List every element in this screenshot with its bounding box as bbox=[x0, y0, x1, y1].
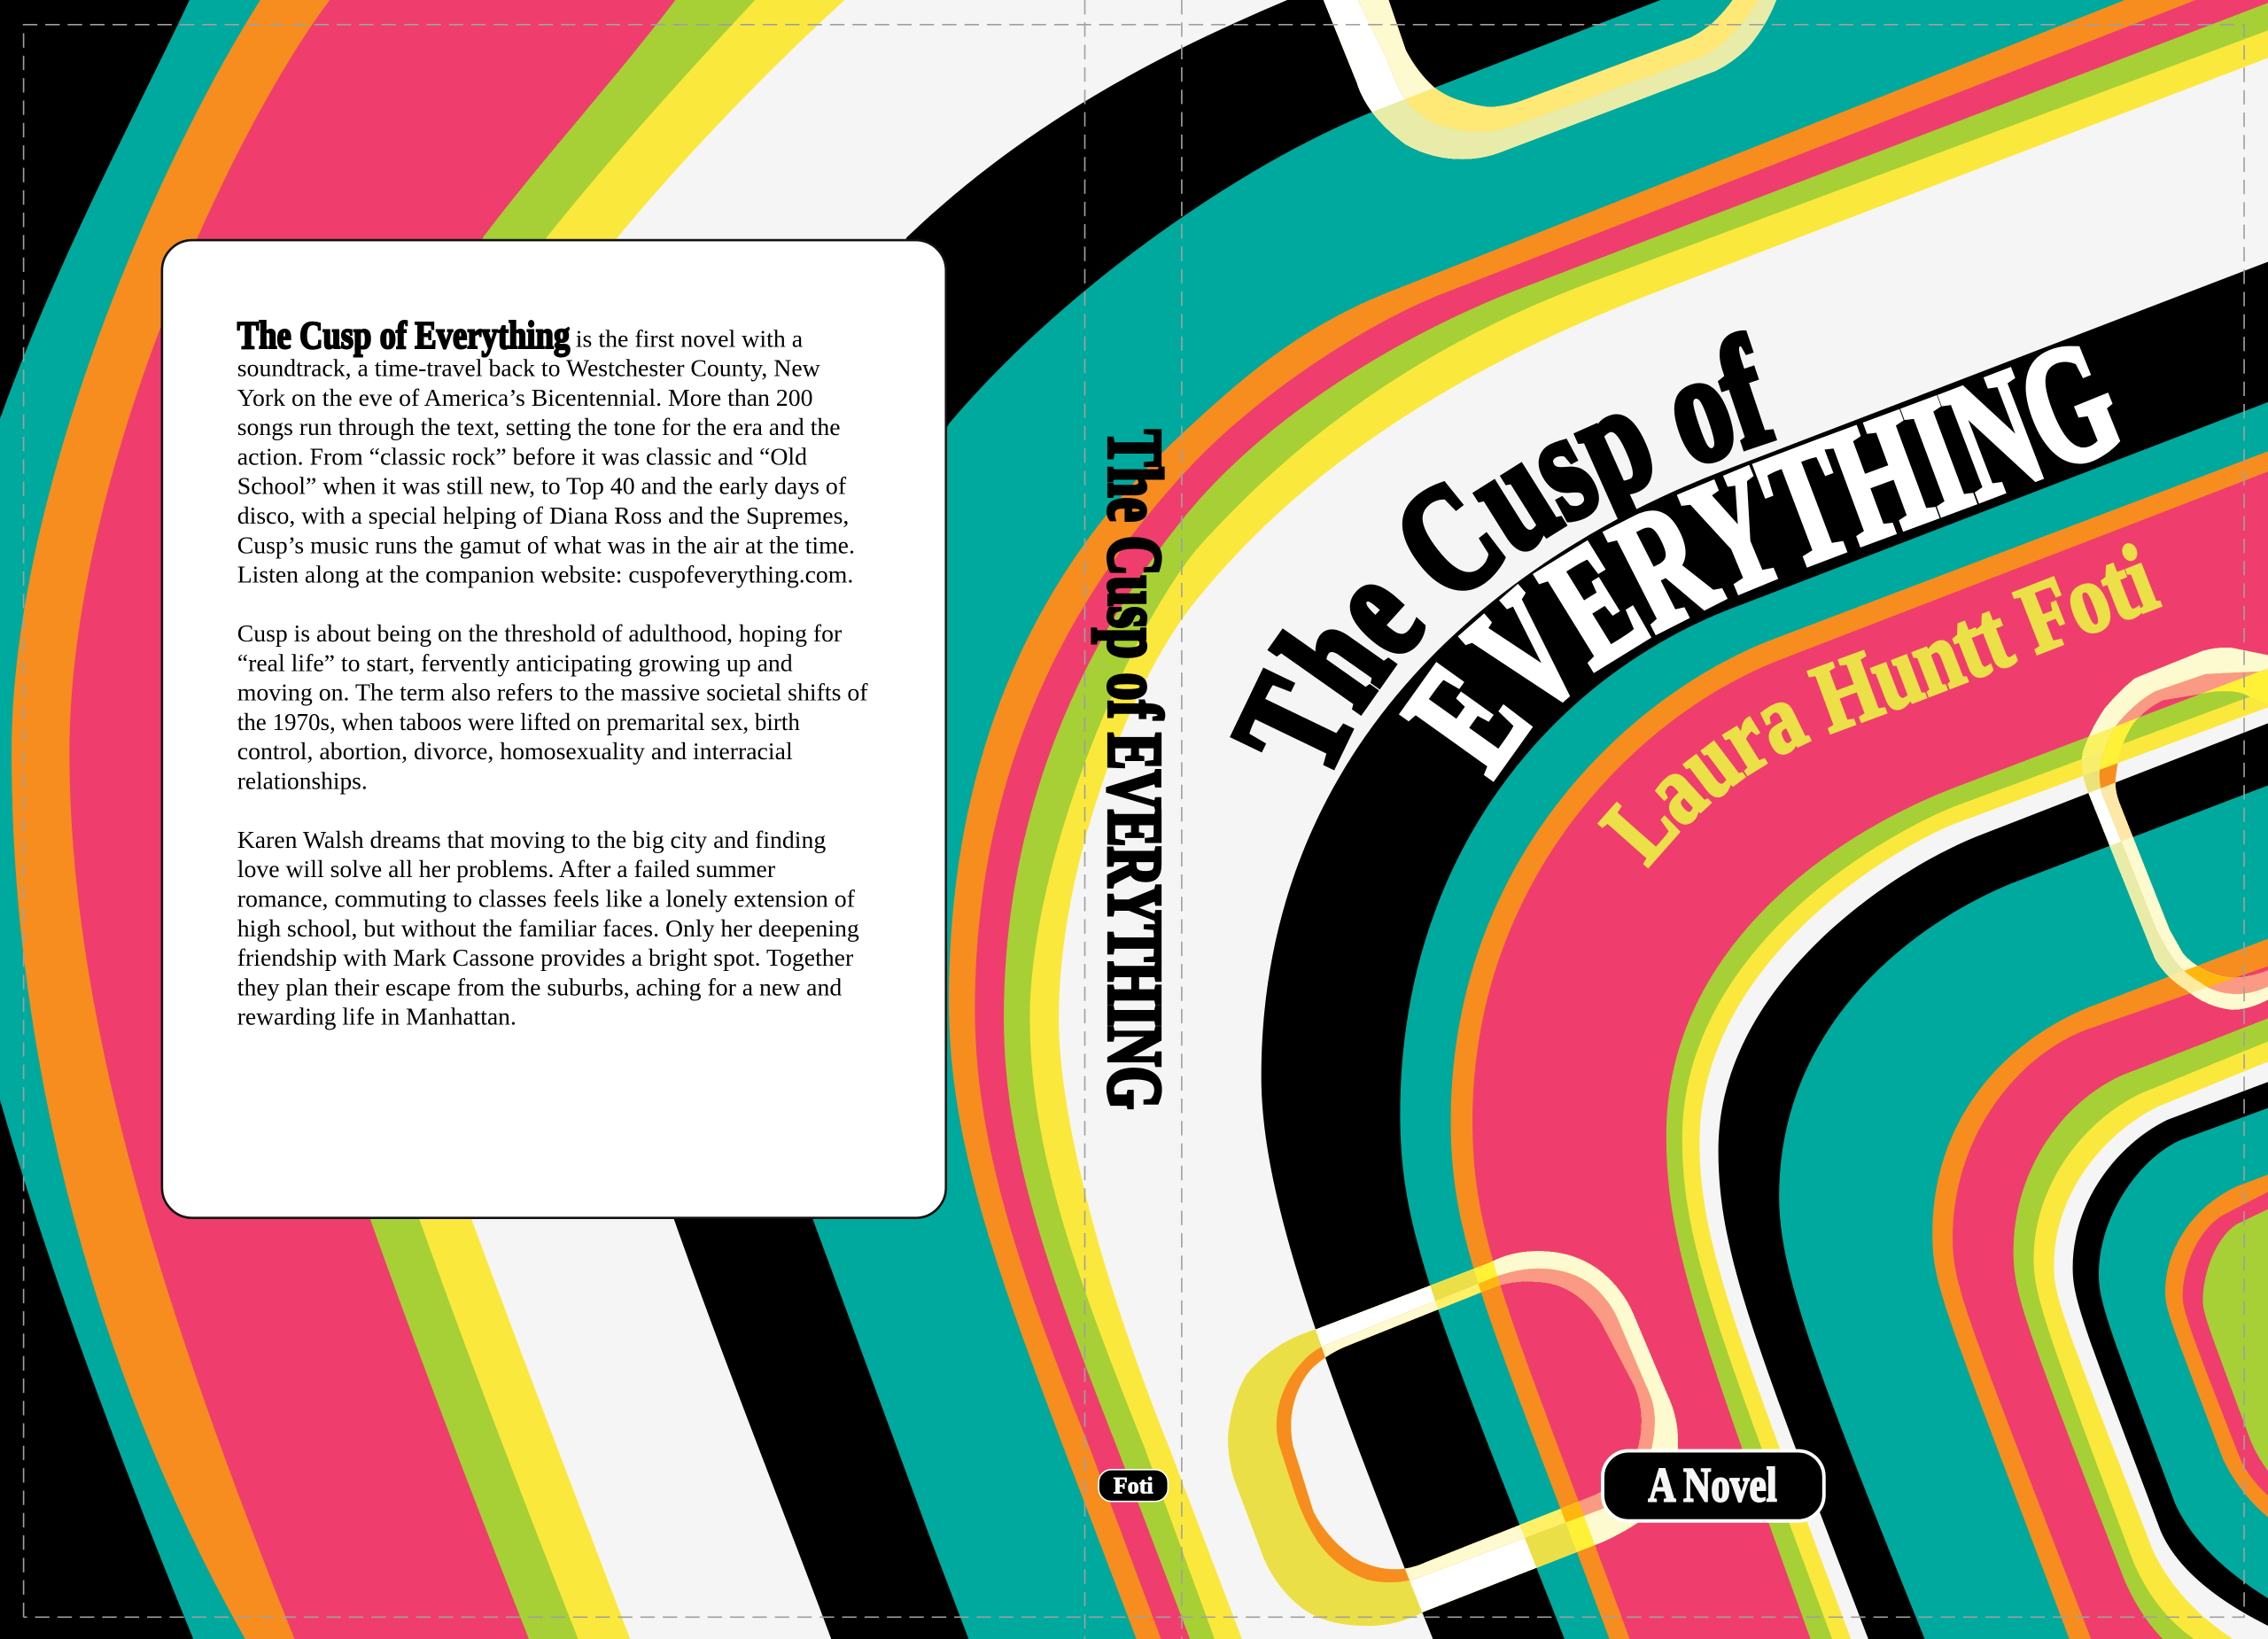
a novel badge bbox=[1603, 1451, 1824, 1521]
blurb paragraph 1 bbox=[237, 314, 855, 588]
blurb paragraph 1: Cusp’s music runs the gamut of what was in the air at the time. bbox=[237, 532, 855, 559]
spine author badge: Foti bbox=[1114, 1473, 1153, 1499]
a novel badge: A Novel bbox=[1648, 1459, 1777, 1513]
blurb paragraph 1: disco, with a special helping of Diana Ross and the Supremes, bbox=[237, 502, 849, 530]
blurb paragraph 1: The Cusp of Everything bbox=[237, 314, 570, 357]
front title line 2: EVERYTHING bbox=[1399, 346, 2121, 782]
blurb paragraph 2: control, abortion, divorce, homosexuality and interracial bbox=[237, 738, 793, 765]
blurb paragraph 2: moving on. The term also refers to the massive societal shifts of bbox=[237, 680, 868, 707]
blurb paragraph 1: York on the eve of America’s Bicentennial. More than 200 bbox=[237, 385, 813, 412]
author name: Laura Huntt Foti bbox=[1597, 543, 2163, 868]
panel: back cover blurb bbox=[162, 240, 946, 1218]
blurb paragraph 3: high school, but without the familiar faces. Only her deepening bbox=[237, 915, 859, 943]
blurb paragraph 1: songs run through the text, setting the tone for the era and the bbox=[237, 414, 841, 441]
blurb paragraph 2 bbox=[237, 620, 868, 795]
blurb paragraph 2: the 1970s, when taboos were lifted on premarital sex, birth bbox=[237, 709, 800, 736]
blurb paragraph 3: friendship with Mark Cassone provides a bright spot. Together bbox=[237, 944, 853, 972]
blurb paragraph 1: School” when it was still new, to Top 40 and the early days of bbox=[237, 473, 847, 501]
blurb paragraph 1: soundtrack, a time-travel back to Westchester County, New bbox=[237, 355, 820, 383]
blurb paragraph 1: Listen along at the companion website: cuspofeverything.com. bbox=[237, 561, 853, 588]
blurb paragraph 3: romance, commuting to classes feels like a lonely extension of bbox=[237, 886, 856, 913]
blurb paragraph 2: relationships. bbox=[237, 767, 368, 795]
blurb paragraph 2: “real life” to start, fervently anticipating growing up and bbox=[237, 649, 793, 677]
blurb paragraph 3: rewarding life in Manhattan. bbox=[237, 1004, 517, 1031]
blurb paragraph 1: action. From “classic rock” before it was classic and “Old bbox=[237, 443, 807, 470]
stripe set 4: lower right inner stripes bbox=[1932, 939, 2268, 1639]
spine author badge bbox=[1099, 1470, 1168, 1502]
front title line 1: The Cusp of bbox=[1230, 330, 1777, 771]
translucent ring: right bbox=[2082, 648, 2268, 1010]
blurb paragraph 2: Cusp is about being on the threshold of adulthood, hoping for bbox=[237, 620, 842, 648]
blurb paragraph 3: Karen Walsh dreams that moving to the big city and finding bbox=[237, 827, 826, 854]
blurb paragraph 3: they plan their escape from the suburbs, aching for a new and bbox=[237, 974, 842, 1001]
translucent ring: bottom bbox=[1228, 1251, 1678, 1627]
blurb paragraph 3 bbox=[237, 827, 859, 1031]
stripe set 2: spine sweep bbox=[608, 0, 2268, 1639]
translucent ring: top bbox=[1324, 0, 1776, 159]
blurb paragraph 3: love will solve all her problems. After a failed summer bbox=[237, 856, 775, 883]
spine title: The Cusp of EVERYTHING bbox=[1092, 430, 1177, 1109]
stripe set 3: front cover title band bbox=[1262, 262, 2268, 1639]
blurb paragraph 1: is the first novel with a bbox=[576, 325, 803, 353]
